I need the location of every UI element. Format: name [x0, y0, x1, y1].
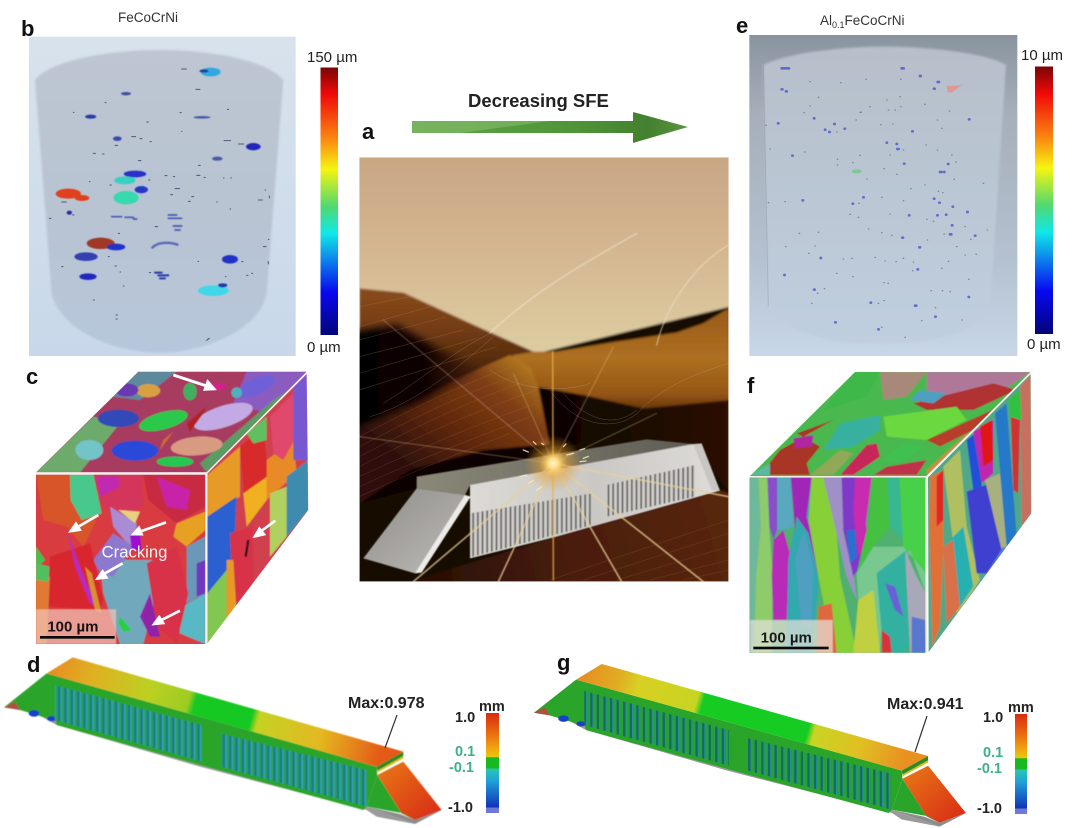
sky	[357, 155, 732, 362]
displacement colour bar: 0.1	[455, 744, 475, 760]
hills	[357, 288, 730, 583]
title: Al0.1FeCoCrNi: Al	[820, 13, 832, 28]
displacement colour bar	[448, 699, 505, 816]
title: Al0.1FeCoCrNi: 0.1	[832, 20, 845, 30]
panel a: laser melting scene	[352, 155, 732, 583]
panel label c: c	[26, 364, 38, 389]
displacement colour bar: mm	[1008, 700, 1034, 716]
scale bar 100 µm	[40, 618, 115, 639]
scale bar 100 µm	[753, 630, 829, 649]
colour bar 0 to 150 µm	[307, 49, 357, 356]
melted part: silver lattice component	[363, 439, 720, 573]
EBSD cube with columnar grains	[747, 370, 1033, 653]
panel label d: d	[27, 652, 40, 677]
deformation part	[4, 657, 442, 824]
max callout: Max:0.941	[887, 696, 964, 713]
arrow: decreasing SFE	[412, 112, 688, 143]
title: FeCoCrNi: FeCoCrNi	[118, 10, 178, 25]
panel label f: f	[747, 373, 755, 398]
max callout	[348, 695, 425, 748]
displacement colour bar: -0.1	[449, 760, 474, 776]
crack arrows	[68, 375, 275, 625]
panel c: FeCoCrNi grain cube	[26, 364, 310, 645]
displacement colour bar: -1.0	[448, 800, 473, 816]
melt-pool glow and sparks	[520, 435, 588, 492]
displacement colour bar	[977, 700, 1034, 817]
colour bar 0 to 10 µm	[1021, 47, 1063, 353]
black shadow on left hill	[352, 325, 483, 428]
colour bar 0 to 10 µm: 0 µm	[1027, 336, 1061, 353]
displacement colour bar: 0.1	[983, 745, 1003, 761]
displacement colour bar: 1.0	[455, 710, 475, 726]
panel f: Al0.1FeCoCrNi grain cube	[747, 370, 1033, 653]
colour bar 0 to 150 µm: 150 µm	[307, 49, 357, 66]
hill contour lines	[359, 297, 729, 580]
scale bar 100 µm: 100 µm	[761, 630, 812, 647]
cracking label: Cracking	[102, 542, 167, 561]
colour bar 0 to 10 µm: 10 µm	[1021, 47, 1063, 64]
EBSD cube with cracks	[33, 370, 310, 645]
max callout: Max:0.978	[348, 695, 425, 712]
max callout	[887, 696, 964, 752]
colour bar 0 to 150 µm: 0 µm	[307, 339, 341, 356]
cylinder pore rendering	[29, 37, 296, 356]
panel label g: g	[557, 650, 570, 675]
panel label e: e	[736, 13, 748, 38]
displacement colour bar: 1.0	[983, 710, 1003, 726]
panel b: FeCoCrNi pore map	[21, 10, 357, 356]
laser rays	[359, 233, 729, 582]
panel d: distortion map FeCoCrNi	[4, 652, 505, 824]
panel label a: a	[362, 119, 375, 144]
displacement colour bar: mm	[479, 699, 505, 715]
scale bar 100 µm: 100 µm	[47, 618, 98, 635]
deformation part	[534, 664, 966, 827]
cylinder pore rendering	[749, 35, 1017, 356]
panel a heading with arrow	[362, 90, 688, 144]
title: Al0.1FeCoCrNi: FeCoCrNi	[845, 13, 905, 28]
decreasing SFE label: Decreasing SFE	[468, 90, 609, 111]
displacement colour bar: -0.1	[977, 761, 1002, 777]
displacement colour bar: -1.0	[977, 801, 1002, 817]
panel label b: b	[21, 16, 34, 41]
panel g: distortion map Al0.1FeCoCrNi	[534, 650, 1034, 827]
panel e: Al0.1FeCoCrNi pore map	[736, 13, 1063, 356]
